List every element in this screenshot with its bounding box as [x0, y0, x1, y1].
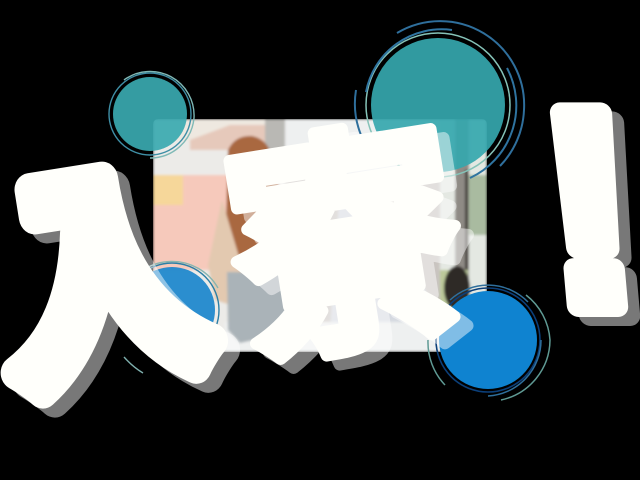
character: 寮: 寮: [209, 100, 484, 398]
circle: blue, lower right: [428, 285, 550, 400]
circle: small teal, top left: [109, 71, 194, 158]
heading: 入寮！: [0, 53, 640, 425]
heading shadow: 入寮！: [0, 62, 640, 434]
circle: large teal, top right: [355, 21, 524, 178]
photo: woman working at a laptop: [153, 119, 487, 352]
circle: blue, lower left: [124, 261, 219, 373]
heading shadow: 入寮！: 寮: [222, 109, 497, 407]
